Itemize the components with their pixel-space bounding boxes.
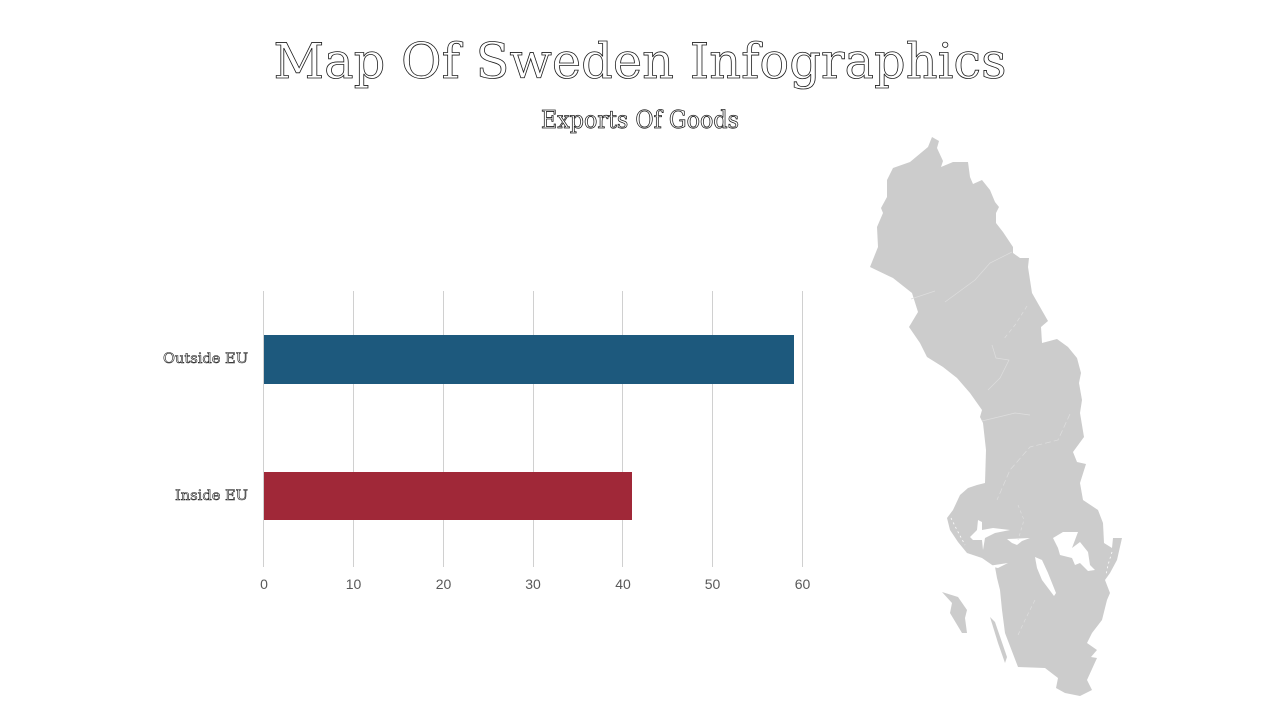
axis labels: 60 bbox=[795, 576, 810, 592]
bar: Inside EU 41 bbox=[264, 472, 632, 520]
regional borders bbox=[911, 252, 1070, 635]
bar: Outside EU 59 bbox=[264, 335, 794, 384]
axis labels: 20 bbox=[436, 576, 451, 592]
island: Gotland bbox=[942, 592, 967, 633]
category label: Outside EU: Outside EU bbox=[163, 351, 248, 367]
island: Oland bbox=[990, 617, 1007, 663]
axis labels: 40 bbox=[615, 576, 631, 592]
axis labels: 30 bbox=[525, 576, 541, 592]
title: Map Of Sweden Infographics bbox=[274, 33, 1006, 90]
subtitle: Exports Of Goods bbox=[541, 106, 739, 134]
category label: Inside EU: Inside EU bbox=[175, 488, 248, 504]
lakes bbox=[970, 520, 1095, 596]
axis labels: 50 bbox=[705, 576, 720, 592]
map of Sweden bbox=[870, 137, 1122, 696]
frayed coasts bbox=[874, 271, 1112, 575]
mainland bbox=[870, 137, 1122, 696]
axis labels: 0 bbox=[260, 576, 268, 592]
bar chart: exports of goods bbox=[163, 291, 810, 592]
axis labels: 10 bbox=[346, 576, 361, 592]
axis labels bbox=[260, 576, 810, 592]
